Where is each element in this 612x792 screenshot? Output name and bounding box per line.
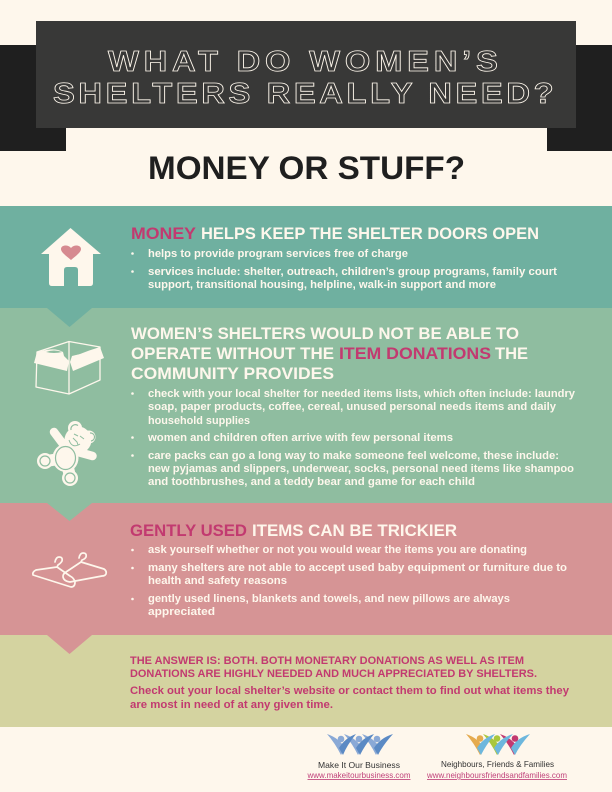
item donations bullets: new pyjamas and slippers, underwear, socks, personal need items like shampoo [148,463,574,475]
item donations bullets: and toothbrushes, and a teddy bear and game for each child [148,476,475,488]
panel: the answer [0,635,612,727]
gently used heading [130,521,457,540]
link: makeitourbusiness: www.makeitourbusiness.com [307,770,411,780]
item donations bullets: household supplies [148,415,250,427]
icon: coloured figures [466,734,530,755]
money bullets: helps to provide program services free of charge [148,248,408,260]
item donations bullets: check with your local shelter for needed items lists, which often include: laundry [148,388,576,400]
gently used bullets: health and safety reasons [148,575,287,587]
logo: Make It Our Business [307,734,411,780]
item donations heading: ITEM DONATIONS [339,344,491,363]
answer text [130,655,570,711]
subtitle: MONEY OR STUFF? [148,150,465,186]
arrow: green [47,503,92,521]
icon: blue figures [327,734,393,755]
gently used bullets: gently used linens, blankets and towels, and new pillows are always [148,593,510,605]
item donations bullets: women and children often arrive with few personal items [147,432,453,444]
panel: gently used [0,503,612,635]
answer text: Check out your local shelter’s website or contact them to find out what items they [130,685,570,697]
item donations heading: OPERATE WITHOUT THE [131,344,334,363]
gently used heading: GENTLY USED [130,521,247,540]
money bullets: support, transitional housing, helpline, walk-in support and more [148,279,496,291]
gently used bullets: ask yourself whether or not you would wear the items you are donating [148,544,527,556]
title text [53,45,554,110]
gently used bullets: appreciated [148,606,215,618]
item donations heading: THE [495,344,528,363]
money bullets [131,248,557,291]
icon: teddy bear [37,421,96,486]
logo: Neighbours, Friends & Families [426,734,567,780]
money heading: HELPS KEEP THE SHELTER DOORS OPEN [201,224,539,243]
arrow: teal [47,308,92,327]
item donations bullets: soap, paper products, coffee, cereal, unused personal needs items and daily [148,401,557,413]
title text: WHAT DO WOMEN’S [108,45,498,78]
money bullets: services include: shelter, outreach, children’s group programs, family court [148,266,557,278]
answer text: DONATIONS ARE HIGHLY NEEDED AND MUCH APPRECIATED BY SHELTERS. [130,668,537,680]
item donations heading: WOMEN’S SHELTERS WOULD NOT BE ABLE TO [131,324,519,343]
title text: SHELTERS REALLY NEED? [53,77,554,110]
money heading: MONEY [131,224,197,243]
link: neighboursfriendsandfamilies: www.neighboursfriendsandfamilies.com [426,770,567,780]
item donations heading: COMMUNITY PROVIDES [131,364,334,383]
panel: money [0,206,612,308]
logo: Make It Our Business: Make It Our Business [318,760,400,770]
gently used bullets [131,544,567,618]
gently used bullets: many shelters are not able to accept used baby equipment or furniture due to [148,562,567,574]
logo: Neighbours, Friends & Families: Neighbours, Friends & Families [441,759,554,769]
answer text: THE ANSWER IS: BOTH. BOTH MONETARY DONATIONS AS WELL AS ITEM [130,655,524,667]
icon: house with heart [41,228,101,286]
icon: hangers [33,553,106,587]
gently used heading: ITEMS CAN BE TRICKIER [252,521,457,540]
panel: item donations [0,308,612,503]
answer text: are most in need of at any given time. [130,699,333,711]
item donations bullets [131,388,576,488]
title banner [0,21,612,151]
arrow: pink [47,635,92,654]
icon: open box [34,342,104,394]
item donations bullets: care packs can go a long way to make someone feel welcome, these include: [148,450,559,462]
item donations heading [131,324,528,383]
